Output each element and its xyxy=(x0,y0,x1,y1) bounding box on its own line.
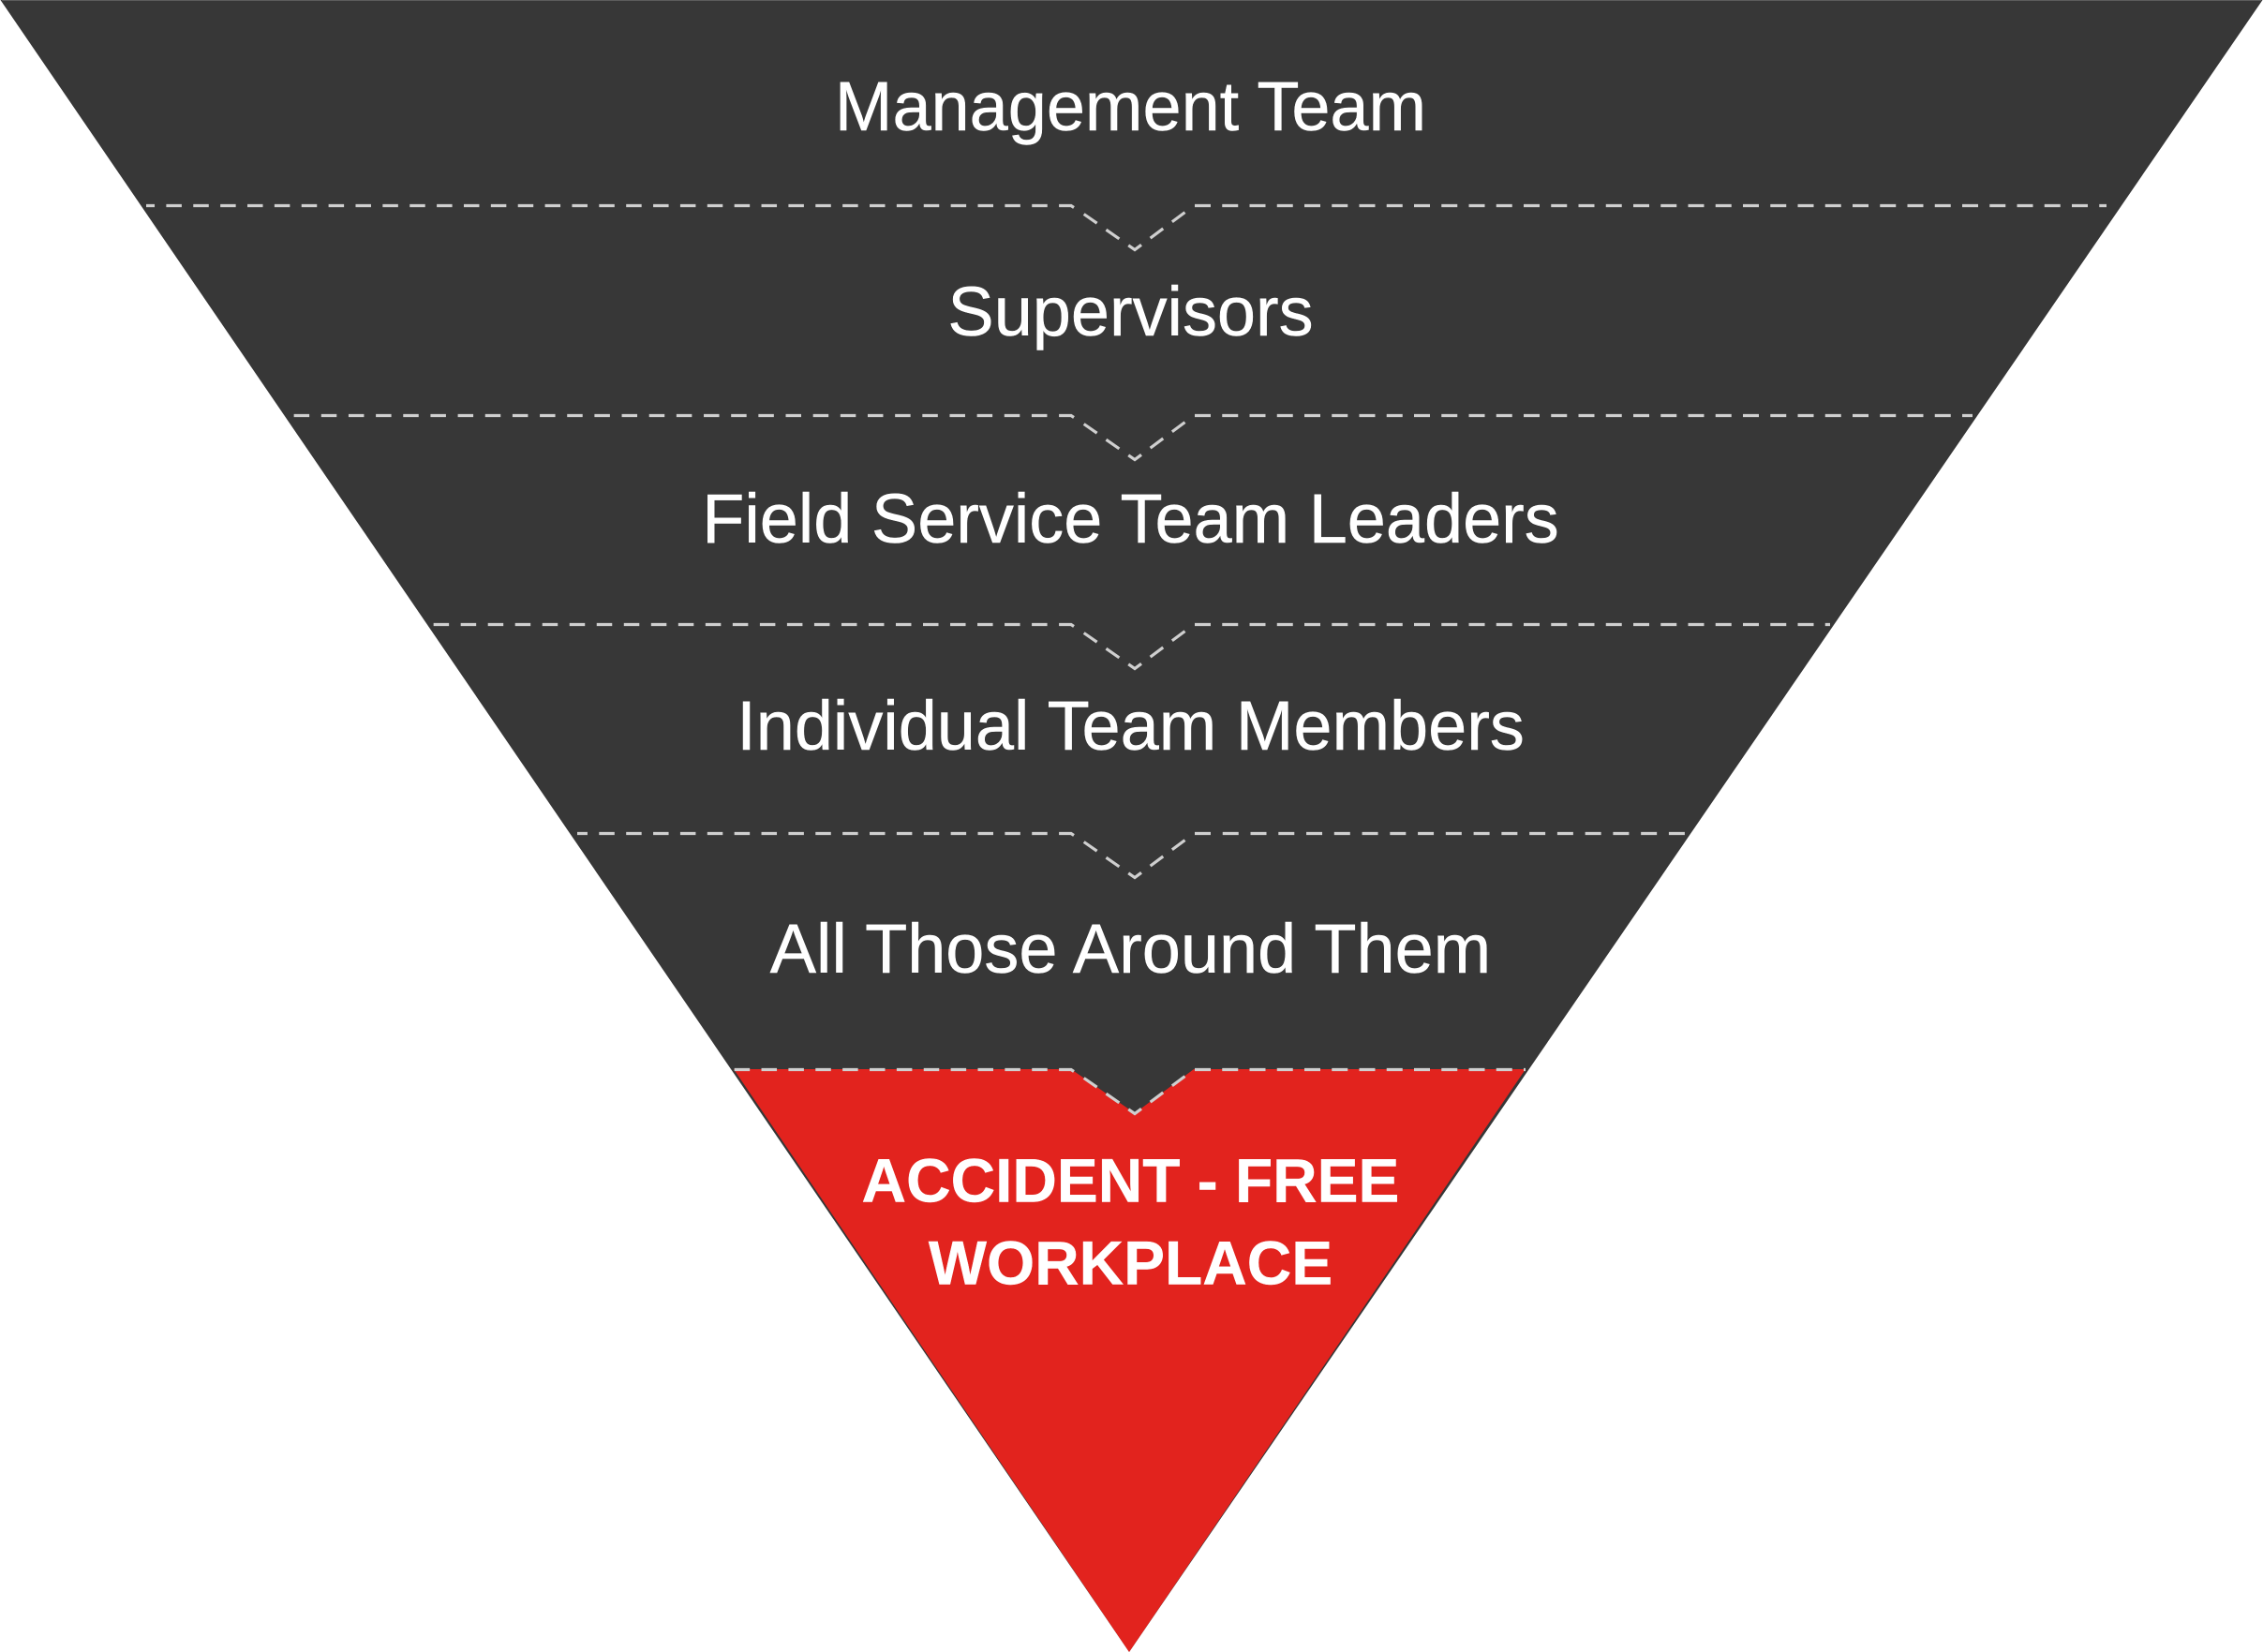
level label: Management Team: Management Team xyxy=(835,67,1426,145)
level label: Supervisors: Supervisors xyxy=(947,273,1314,350)
dashed divider with chevron 5 xyxy=(733,1070,1526,1113)
dashed divider with chevron 4 xyxy=(577,834,1685,877)
dashed divider with chevron 1 xyxy=(146,206,2107,249)
red tip: accident-free workplace xyxy=(734,1069,1526,1652)
result label: ACCIDENT - FREE WORKPLACE xyxy=(862,1145,1399,1297)
result label: ACCIDENT - FREE WORKPLACE: WORKPLACE xyxy=(929,1228,1332,1297)
level label: All Those Around Them: All Those Around Them xyxy=(770,910,1491,988)
result label: ACCIDENT - FREE WORKPLACE: ACCIDENT - FREE xyxy=(862,1145,1399,1214)
dashed divider with chevron 3 xyxy=(430,624,1830,669)
dashed divider with chevron 2 xyxy=(290,416,1973,459)
level label: Field Service Team Leaders: Field Service Team Leaders xyxy=(702,480,1559,558)
level label: Individual Team Members: Individual Team Members xyxy=(737,687,1525,765)
